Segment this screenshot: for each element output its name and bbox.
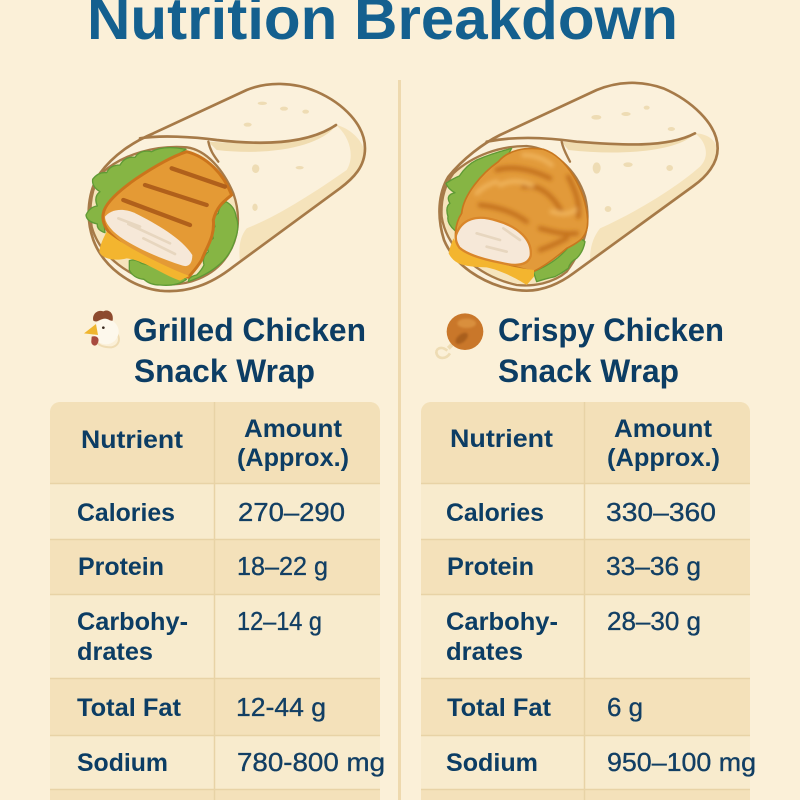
- heading: crispy chicken: Crispy Chicken: [498, 312, 724, 348]
- row: carbohydrates: 28–30 g: [607, 606, 701, 636]
- row: protein: Protein: [78, 553, 164, 581]
- row: carbohydrates: drates: [77, 638, 153, 666]
- row: total fat: [447, 692, 643, 722]
- row: carbohydrates: Carbohy-: [446, 608, 558, 636]
- row: total fat: Total Fat: [447, 694, 552, 722]
- row: carbohydrates: [446, 606, 701, 666]
- icon: chicken drumstick: [436, 313, 483, 358]
- heading: grilled chicken: [133, 312, 366, 389]
- row: carbohydrates: drates: [446, 638, 523, 666]
- column divider: [398, 80, 401, 800]
- illustration: crispy chicken wrap: [439, 83, 718, 291]
- table header: [81, 415, 349, 472]
- row: calories: Calories: [77, 499, 175, 527]
- table header: Amount: [244, 415, 343, 443]
- table header: Nutrient: [450, 425, 554, 453]
- row: total fat: 12-44 g: [236, 692, 326, 722]
- table header: Nutrient: [81, 426, 184, 454]
- row: total fat: Total Fat: [77, 694, 182, 722]
- heading: grilled chicken: Snack Wrap: [134, 353, 315, 389]
- row: sodium: 780-800 mg: [237, 747, 385, 777]
- row: sodium: [77, 747, 385, 777]
- row: calories: Calories: [446, 499, 544, 527]
- row: protein: 33–36 g: [606, 551, 701, 581]
- row: calories: [446, 497, 716, 527]
- row: protein: [78, 551, 328, 581]
- row: calories: 270–290: [238, 497, 345, 527]
- row: calories: 330–360: [606, 497, 716, 527]
- heading: crispy chicken: Snack Wrap: [498, 353, 679, 389]
- row: calories: [77, 497, 345, 527]
- row: sodium: 950–100 mg: [607, 747, 756, 777]
- table: crispy chicken nutrition: [421, 402, 756, 800]
- row: sodium: [446, 747, 756, 777]
- illustration: grilled chicken wrap: [86, 84, 365, 291]
- row: protein: [447, 551, 701, 581]
- row: protein: 18–22 g: [237, 551, 328, 581]
- table header: (Approx.): [607, 444, 720, 472]
- row: carbohydrates: Carbohy-: [77, 608, 188, 636]
- row: protein: Protein: [447, 553, 534, 581]
- heading: grilled chicken: Grilled Chicken: [133, 312, 366, 348]
- row: total fat: [77, 692, 326, 722]
- icon: chicken head: [84, 311, 119, 347]
- heading: crispy chicken: [498, 312, 724, 389]
- table: grilled chicken nutrition: [50, 402, 385, 800]
- row: carbohydrates: 12–14 g: [237, 606, 322, 636]
- table header: Amount: [614, 415, 713, 443]
- table header: (Approx.): [237, 444, 349, 472]
- row: total fat: 6 g: [607, 692, 643, 722]
- row: sodium: Sodium: [77, 749, 168, 777]
- row: carbohydrates: [77, 606, 322, 666]
- table header: [450, 415, 720, 472]
- row: sodium: Sodium: [446, 749, 538, 777]
